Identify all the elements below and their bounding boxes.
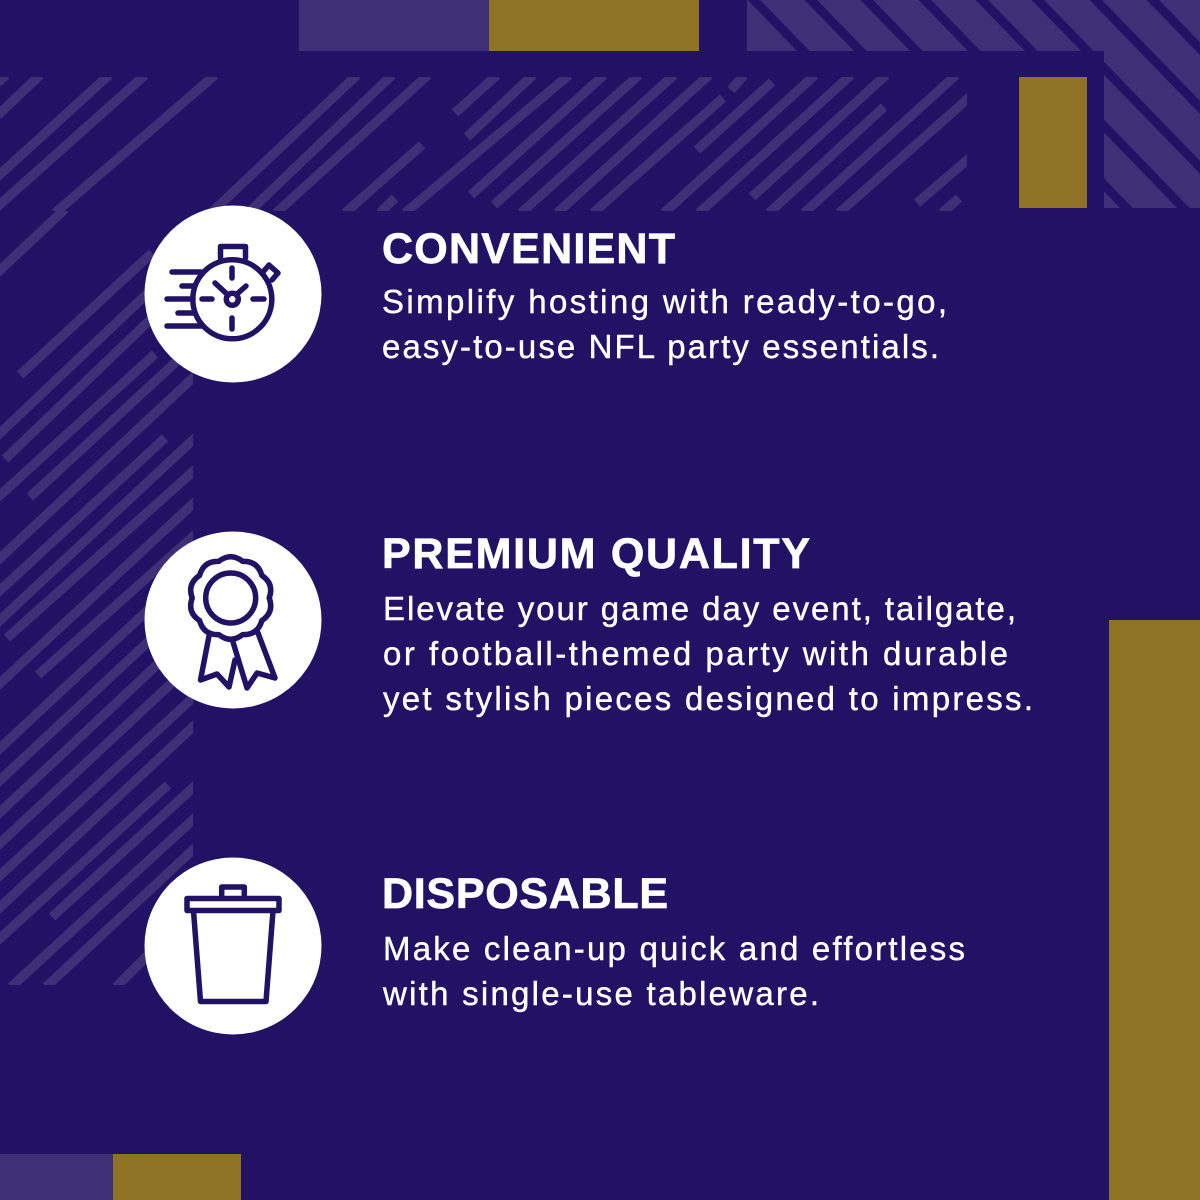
heading: convenient: CONVENIENT [382, 225, 675, 273]
icon: stopwatch in white circle [144, 206, 322, 382]
icon: ribbon award in white circle [144, 532, 322, 708]
bottom purple bar [0, 1154, 113, 1200]
gold block upper right [1019, 77, 1087, 208]
bottom gold bar [113, 1154, 241, 1200]
gold column right [1109, 620, 1200, 1200]
top gold bar [489, 0, 699, 51]
text: premium quality description: or football-themed party with durable [383, 635, 1008, 672]
heading: disposable: DISPOSABLE [382, 870, 668, 918]
top purple bar [299, 0, 489, 51]
text: convenient description [382, 283, 947, 365]
heading: premium quality: PREMIUM QUALITY [382, 530, 810, 578]
top stripe band [0, 75, 972, 213]
text: premium quality description: Elevate your game day event, tailgate, [383, 590, 1016, 627]
top right striped block [747, 0, 1200, 223]
left stripe band [0, 209, 197, 987]
text: disposable description: Make clean-up quick and effortless [383, 930, 965, 967]
text: disposable description [382, 930, 965, 1012]
text: convenient description: Simplify hosting with ready-to-go, [382, 283, 947, 320]
text: premium quality description: yet stylish pieces designed to impress. [383, 680, 1033, 717]
text: disposable description: with single-use tableware. [382, 975, 819, 1012]
text: premium quality description [383, 590, 1033, 717]
text: convenient description: easy-to-use NFL party essentials. [382, 328, 939, 365]
icon: trash can in white circle [144, 858, 322, 1034]
